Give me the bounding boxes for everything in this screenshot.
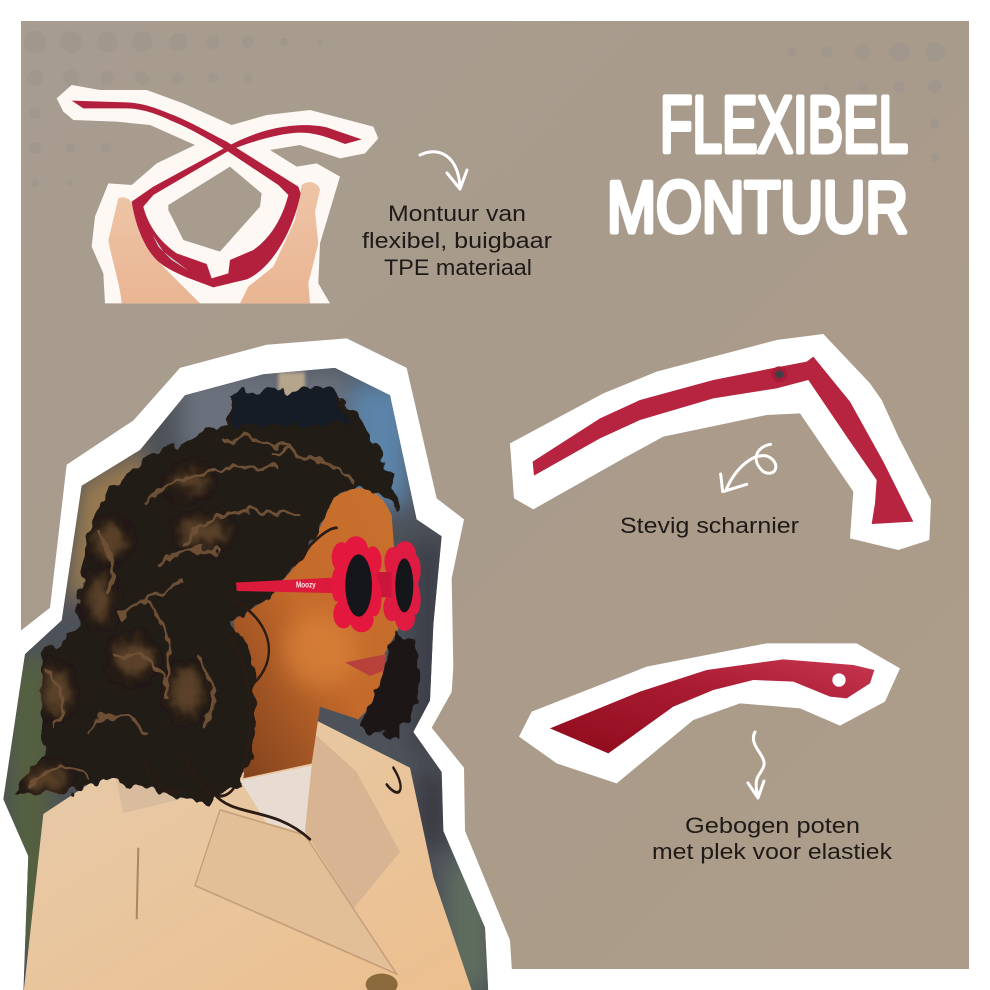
cutout: curved temple [519,643,900,783]
lens glint [153,235,188,271]
red flower sunglasses [236,536,421,632]
arrow: to frame [420,152,467,189]
red temple [533,357,913,524]
cutout: hinge temple [510,334,931,550]
hinge screw [771,366,787,382]
temple arm [236,577,337,593]
right curls [360,633,422,738]
arrow: squiggle down [748,732,764,798]
left hand thumb [108,197,200,303]
left lapel [195,810,397,974]
hair mass [17,390,398,804]
coat shadow seam [137,848,138,919]
left flower rim [331,536,382,632]
bent red frame [72,101,362,287]
halftone dots [24,31,945,187]
white shirt [240,766,312,833]
lips [345,654,387,676]
white photo border [0,338,513,990]
warm hair sheen [27,472,227,791]
right flower rim [383,541,421,631]
left collar [116,778,184,813]
text: gebogen poten: Gebogen poten [685,813,860,838]
white cutout border [519,643,900,783]
white cutout border [57,85,378,303]
button [366,974,398,990]
cheek glow [283,612,357,688]
right hand fingers [240,182,320,303]
title [607,80,908,248]
text: gebogen poten [652,813,893,864]
elastic hole [832,673,846,687]
text: stevig scharnier: Stevig scharnier [620,513,799,538]
text: montuur: flexibel, buigbaar [362,228,552,253]
text: montuur: TPE materiaal [384,255,532,280]
hair highlights [30,439,353,785]
arrow: looped to hinge [721,444,776,492]
curly hair [17,390,422,804]
cutout: child photo [0,338,513,990]
bridge [377,572,392,597]
photo content [0,355,500,990]
top hair braid [230,390,350,427]
face and neck [233,488,398,778]
brand on arm: Moozy [296,580,316,590]
right lapel [305,734,400,909]
title: MONTUUR [607,168,908,248]
text: montuur [362,201,552,280]
white cutout border [510,334,931,550]
cutout: flexible frame in hand [57,85,378,303]
red temple [550,659,874,753]
lenses [345,554,372,617]
blurred background [0,355,500,990]
text: montuur: Montuur van [388,201,526,226]
loose curls [214,526,402,841]
coat [23,717,473,990]
text: gebogen poten: met plek voor elastiek [652,839,893,864]
